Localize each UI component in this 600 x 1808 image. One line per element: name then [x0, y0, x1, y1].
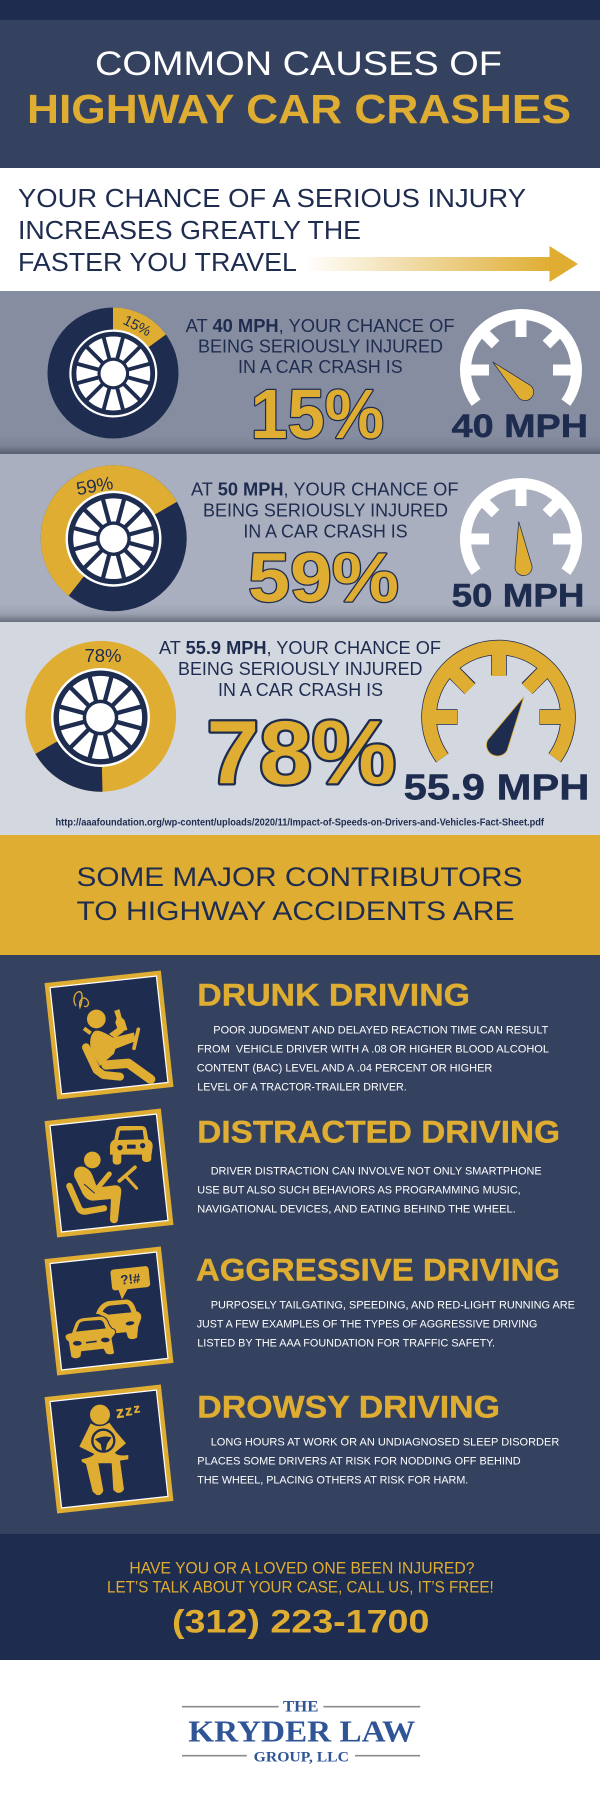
- statement text: BEING SERIOUSLY INJURED: [203, 500, 448, 521]
- text: drowsy driving: [197, 1436, 559, 1486]
- text: aggressive driving: LISTED BY THE AAA FOUNDATION FOR TRAFFIC SAFETY.: [197, 1337, 495, 1349]
- panel: 50 mph: [0, 454, 600, 622]
- panel: intro statement: [0, 168, 600, 291]
- text: drunk driving: POOR JUDGMENT AND DELAYED REACTION TIME CAN RESULT: [213, 1024, 549, 1036]
- call to action text: HAVE YOU OR A LOVED ONE BEEN INJURED?: [129, 1559, 474, 1577]
- heading: aggressive driving: AGGRESSIVE DRIVING: [196, 1252, 560, 1288]
- text: distracted driving: DRIVER DISTRACTION CAN INVOLVE NOT ONLY SMARTPHONE: [211, 1165, 542, 1177]
- big number 15%: 15%: [251, 375, 384, 453]
- title line 1: COMMON CAUSES OF: [95, 45, 502, 83]
- big number 78%: 78%: [207, 703, 396, 803]
- statement text: AT 55.9 MPH, YOUR CHANCE OF: [159, 637, 441, 658]
- arrow: [305, 246, 578, 282]
- statement text: IN A CAR CRASH IS: [218, 679, 383, 700]
- text: drowsy driving: THE WHEEL, PLACING OTHERS AT RISK FOR HARM.: [197, 1474, 468, 1486]
- top band: [0, 0, 600, 20]
- tire chart 78%: [25, 641, 176, 792]
- phone number: (312) 223-1700: [172, 1604, 429, 1640]
- statement text: [186, 315, 455, 377]
- tire chart 15%: [48, 308, 178, 438]
- header panel: [0, 20, 600, 168]
- text: distracted driving: USE BUT ALSO SUCH BEHAVIORS AS PROGRAMMING MUSIC,: [197, 1184, 521, 1196]
- panel: 40 mph: [0, 291, 600, 454]
- heading text: [76, 862, 522, 926]
- intro text: [18, 183, 526, 277]
- source url: http://aaafoundation.org/wp-content/uploads/2020/11/Impact-of-Speeds-on-Drivers-and-Vehicles-Fact-Sheet.pdf: [56, 818, 545, 829]
- heading text: TO HIGHWAY ACCIDENTS ARE: [76, 896, 514, 926]
- title line 2: HIGHWAY CAR CRASHES: [27, 86, 571, 132]
- panel: causes: [0, 955, 600, 1534]
- icon: aggressive driving: ?!#: [120, 1271, 142, 1288]
- heading: drowsy driving: DROWSY DRIVING: [197, 1389, 500, 1425]
- statement text: AT 40 MPH, YOUR CHANCE OF: [186, 315, 455, 336]
- text: aggressive driving: PURPOSELY TAILGATING, SPEEDING, AND RED-LIGHT RUNNING ARE: [211, 1299, 575, 1311]
- logo: KRYDER LAW: [188, 1714, 415, 1749]
- heading: distracted driving: DISTRACTED DRIVING: [197, 1113, 560, 1149]
- logo: GROUP, LLC: [254, 1749, 349, 1765]
- statement text: AT 50 MPH, YOUR CHANCE OF: [191, 479, 458, 500]
- tire chart 78%: 78%: [84, 645, 122, 666]
- panel: call to action: [0, 1534, 600, 1660]
- text: drunk driving: FROM VEHICLE DRIVER WITH A .08 OR HIGHER BLOOD ALCOHOL: [197, 1043, 549, 1055]
- panel: 55.9 mph: [0, 622, 600, 835]
- logo: [182, 1699, 420, 1765]
- text: drunk driving: LEVEL OF A TRACTOR-TRAILER DRIVER.: [197, 1081, 407, 1093]
- text: drunk driving: CONTENT (BAC) LEVEL AND A .04 PERCENT OR HIGHER: [197, 1062, 492, 1074]
- icon: drunk driver: [45, 971, 173, 1099]
- text: drunk driving: [197, 1024, 549, 1093]
- speedometer 50 mph: [466, 483, 577, 576]
- icon: drowsy driver: Z: [133, 1404, 141, 1415]
- statement text: [191, 479, 458, 542]
- tire chart 15%: 15%: [120, 313, 153, 340]
- call to action text: [107, 1559, 494, 1596]
- call to action text: LET’S TALK ABOUT YOUR CASE, CALL US, IT’S FREE!: [107, 1578, 494, 1596]
- big number 59%: 59%: [248, 539, 399, 617]
- speed label 40 mph: 40 MPH: [452, 408, 588, 444]
- icon: aggressive driving: [45, 1247, 173, 1375]
- text: distracted driving: [197, 1165, 542, 1215]
- statement text: IN A CAR CRASH IS: [238, 356, 403, 377]
- panel: contributors heading: [0, 835, 600, 955]
- text: drowsy driving: LONG HOURS AT WORK OR AN UNDIAGNOSED SLEEP DISORDER: [211, 1436, 559, 1448]
- heading text: SOME MAJOR CONTRIBUTORS: [76, 862, 522, 892]
- text: drowsy driving: PLACES SOME DRIVERS AT RISK FOR NODDING OFF BEHIND: [197, 1455, 521, 1467]
- speed label 50 mph: 50 MPH: [452, 578, 584, 614]
- icon: distracted driver: [45, 1109, 173, 1237]
- text: distracted driving: NAVIGATIONAL DEVICES, AND EATING BEHIND THE WHEEL.: [197, 1203, 516, 1215]
- statement text: BEING SERIOUSLY INJURED: [198, 336, 443, 356]
- speedometer 40 mph: [466, 314, 577, 404]
- text: aggressive driving: JUST A FEW EXAMPLES OF THE TYPES OF AGGRESSIVE DRIVING: [197, 1318, 537, 1330]
- icon: drowsy driver: [45, 1385, 173, 1513]
- intro text: YOUR CHANCE OF A SERIOUS INJURY: [18, 183, 526, 213]
- intro text: FASTER YOU TRAVEL: [18, 247, 297, 277]
- heading: drunk driving: DRUNK DRIVING: [197, 977, 470, 1013]
- tire chart 59%: [41, 465, 187, 611]
- intro text: INCREASES GREATLY THE: [18, 215, 361, 245]
- icon: drowsy driver: Z: [125, 1407, 133, 1419]
- statement text: [159, 637, 441, 700]
- statement text: BEING SERIOUSLY INJURED: [178, 658, 422, 679]
- speed label 55.9 mph: 55.9 MPH: [404, 766, 589, 807]
- tire chart 59%: 59%: [75, 472, 115, 499]
- statement text: IN A CAR CRASH IS: [243, 521, 408, 542]
- logo: THE: [283, 1699, 318, 1716]
- icon: drowsy driver: Z: [116, 1406, 125, 1421]
- text: aggressive driving: [197, 1299, 575, 1349]
- speedometer 55.9 mph: [429, 648, 568, 760]
